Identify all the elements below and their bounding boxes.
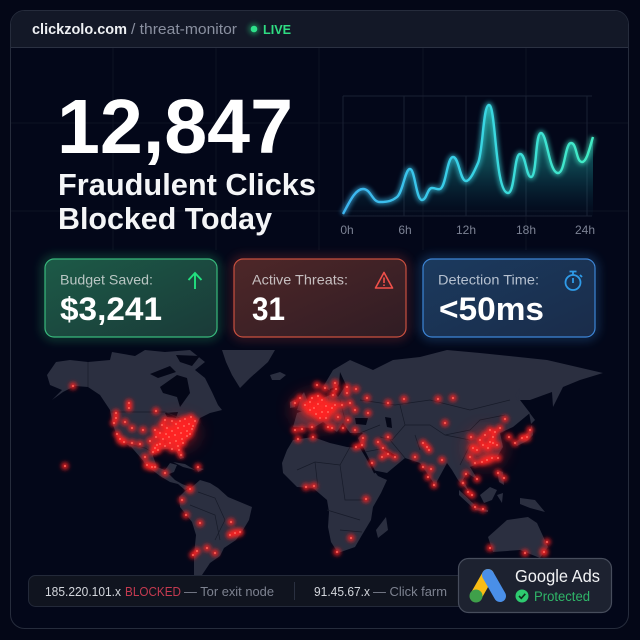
icon: Google Ads logo xyxy=(470,575,500,602)
card: active threats: Active Threats: xyxy=(252,272,348,288)
icon: up arrow xyxy=(188,273,202,289)
icon: warning triangle xyxy=(376,272,392,288)
map: Africa xyxy=(282,437,387,553)
map: Australia xyxy=(488,517,548,558)
map: islands xyxy=(173,372,606,578)
world map xyxy=(47,350,606,578)
site path: clickzolo.com xyxy=(32,22,127,38)
chart axis labels: 24h xyxy=(575,223,595,237)
threat dots on map xyxy=(65,383,547,556)
card: active threats: 31 xyxy=(252,291,285,327)
map: South America xyxy=(179,480,252,578)
card: detection time: Detection Time: xyxy=(438,272,539,288)
map: Eurasia xyxy=(293,350,603,493)
live indicator: LIVE xyxy=(263,22,291,37)
map: seas and lakes xyxy=(150,355,392,428)
log entry: click farm xyxy=(314,585,447,599)
log entry: click farm: — Click farm xyxy=(373,585,447,599)
top bar: / threat-monitor xyxy=(131,22,237,38)
log entry: Tor exit node: BLOCKED xyxy=(125,585,181,599)
headline caption: Fraudulent Clicks xyxy=(58,167,316,202)
map: Greenland xyxy=(222,350,275,388)
chart axis labels xyxy=(340,223,595,237)
card: detection time xyxy=(423,259,595,337)
chart axis labels: 6h xyxy=(398,223,412,237)
headline caption: Blocked Today xyxy=(58,201,273,236)
protected status: Protected xyxy=(534,589,590,604)
map: North America xyxy=(47,350,222,490)
chart axis labels: 18h xyxy=(516,223,536,237)
log entry: Tor exit node: — Tor exit node xyxy=(184,585,274,599)
live indicator xyxy=(248,22,291,37)
icon: stopwatch xyxy=(566,272,582,290)
Google Ads badge: Google Ads xyxy=(515,566,600,586)
line chart xyxy=(340,96,595,237)
log entry: Tor exit node: 185.220.101.x xyxy=(45,585,122,599)
card: active threats xyxy=(234,259,406,337)
chart axis labels: 12h xyxy=(456,223,476,237)
card: detection time: <50ms xyxy=(439,291,544,327)
log entry: click farm: 91.45.67.x xyxy=(314,585,371,599)
activity log bar xyxy=(28,576,468,606)
top bar xyxy=(11,11,628,48)
headline number: 12,847 xyxy=(57,84,293,170)
card: budget saved: $3,241 xyxy=(60,291,162,327)
Google Ads badge xyxy=(458,558,612,612)
log entry: Tor exit node xyxy=(45,585,274,599)
headline caption xyxy=(58,167,316,236)
card: budget saved xyxy=(45,259,217,337)
chart axis labels: 0h xyxy=(340,223,354,237)
card: budget saved: Budget Saved: xyxy=(60,272,153,288)
